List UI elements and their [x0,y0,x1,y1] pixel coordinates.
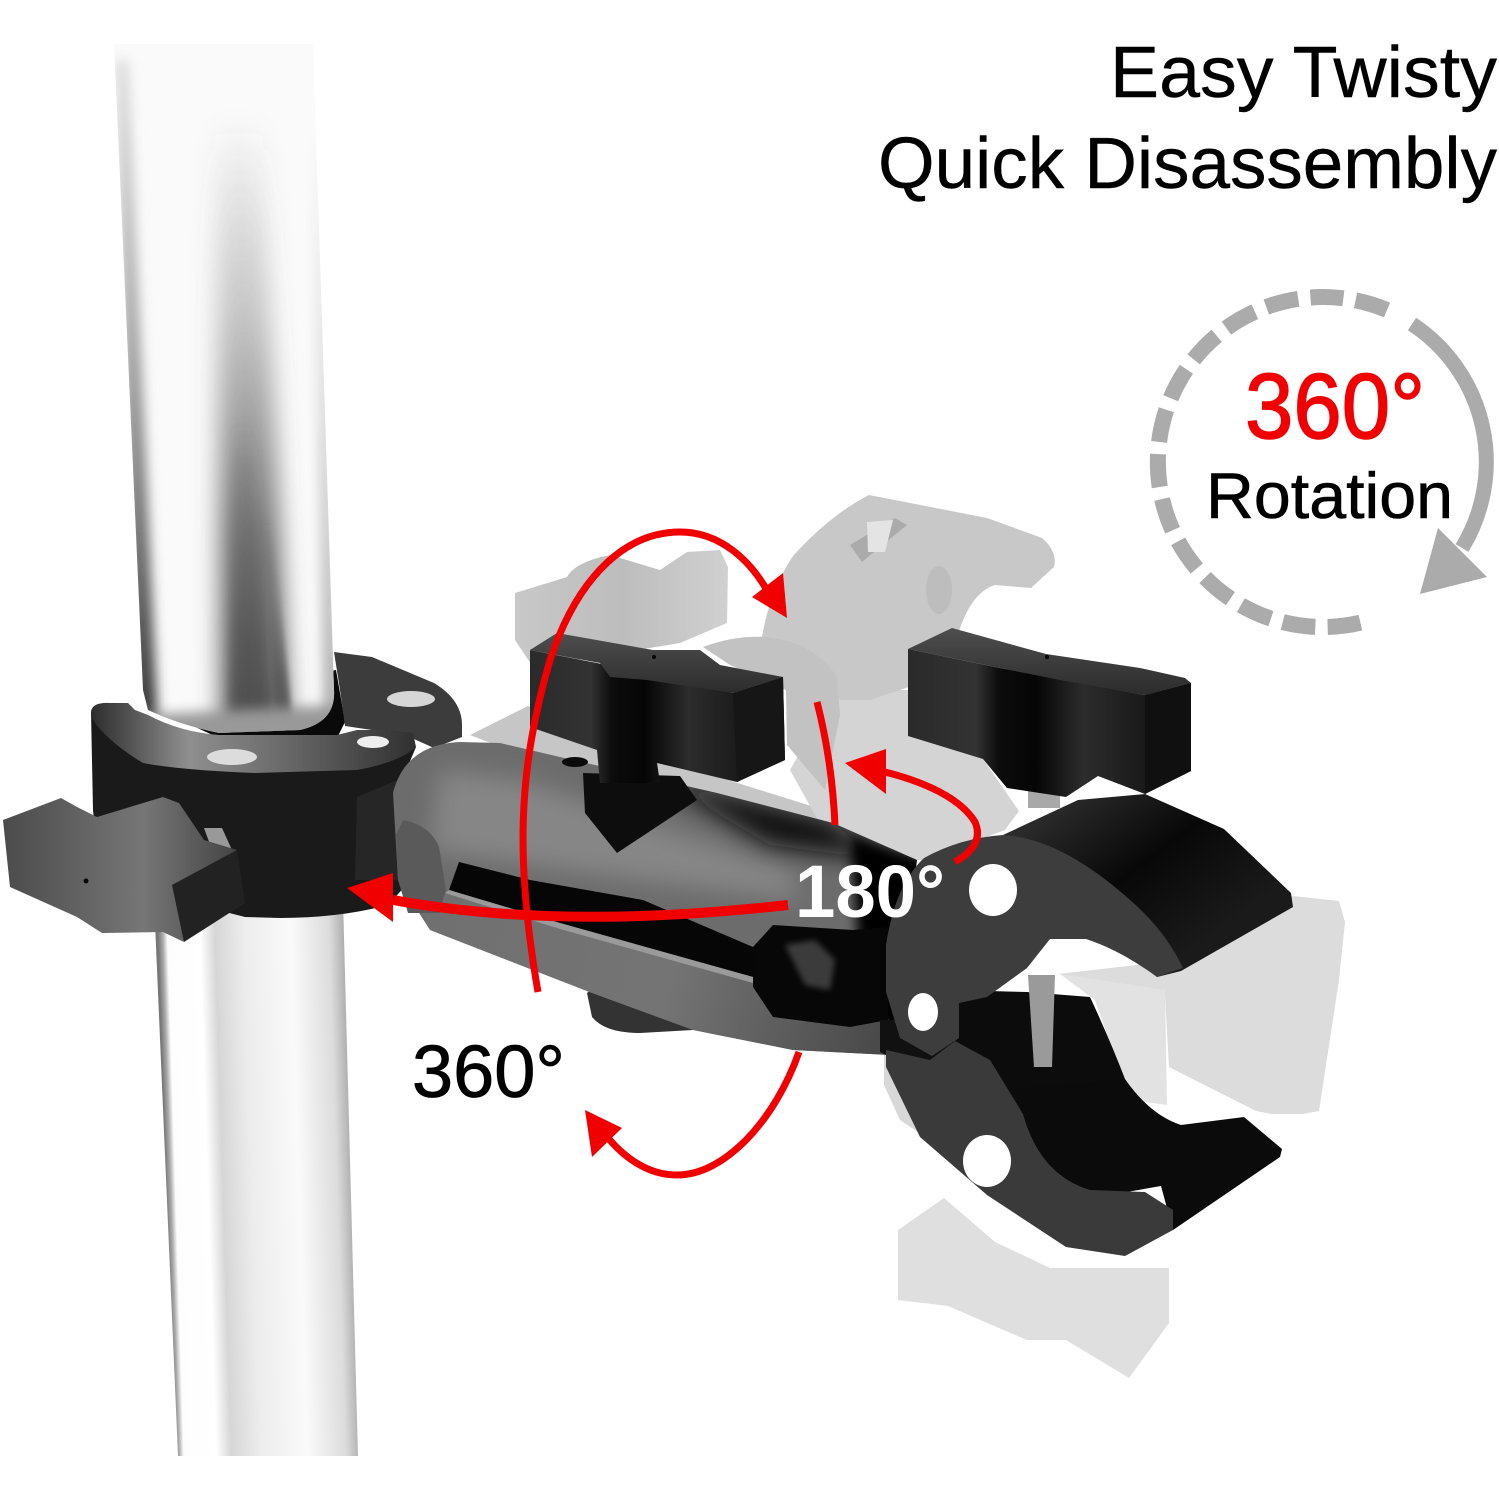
knob pin hole [1045,655,1049,659]
ghost threaded stud [867,520,893,552]
ghost piece below pivot [884,1050,930,1140]
pole clamp [91,652,462,918]
large arc [523,532,768,992]
side knob face [3,797,237,942]
ghost clamp upper jaw [762,495,1055,700]
knob pin hole [84,878,88,884]
knob top face [908,628,1191,695]
dashed ring arc [1158,297,1387,627]
knob front [530,650,785,783]
title [878,33,1497,204]
red arrow: 180 up [845,749,978,862]
head [845,749,886,794]
right knob [908,628,1191,808]
clamp notch [355,780,405,880]
rotation badge [1158,297,1487,627]
solid ring arc [1412,324,1486,548]
red arrow: 180 left [347,873,788,922]
ghost top knob left [515,550,728,667]
knob front [908,649,1191,797]
arm highlight [430,770,800,900]
ghost clamp lower ring [790,690,1019,860]
title line two: Quick Disassembly [878,124,1497,204]
arm dark end [844,832,917,1020]
arm lip highlight [445,890,753,983]
arm ball left facet [396,820,446,913]
arm silhouette [393,742,917,1055]
ghost stud recess [850,518,907,562]
rim under pivot [880,1020,960,1062]
hole lower [963,1135,1011,1187]
shaft [393,900,788,917]
knob end face [733,677,785,782]
ghost right knob [1058,896,1345,1114]
hole upper [969,864,1017,916]
steel pole [100,40,358,1456]
upper jaw side plate [886,835,1183,1056]
ghost hole one [926,566,952,614]
inner dark parts [950,990,1125,1125]
clamp body [91,712,416,918]
label 180 degrees: 180° [795,850,945,933]
arm slot [449,862,753,977]
clamp back jaw [334,652,462,748]
screw under right knob [1028,790,1060,808]
hole pivot [908,993,938,1031]
knob end face [1145,683,1191,794]
upper jaw dark top [1003,794,1293,977]
knob pin hole [652,655,656,659]
jaw clamp [880,794,1293,1256]
recess shadow behind pole [148,670,345,738]
arm dark knob right [753,925,888,1027]
rivet small [357,736,389,748]
clamp side knob [3,797,245,942]
ball arm [393,742,930,1060]
arrowhead [752,573,787,618]
ghost rotated clamp behind [470,495,1345,1378]
ghost arm section [470,706,920,870]
lower stud [587,975,693,1033]
title line one: Easy Twisty [1110,33,1497,113]
clamp top face [91,703,416,773]
knob stem cone [583,773,697,853]
side knob end [172,850,245,942]
360 red text: 360° [1245,354,1425,458]
dark knob highlight [785,940,835,990]
knob top face [530,633,783,693]
middle knob [530,633,785,783]
shaft [885,772,978,862]
lower jaw pad [1000,1079,1282,1230]
ghost lower knob [898,1198,1169,1378]
ring arrowhead [1420,528,1487,594]
rivet back [387,691,435,707]
label 360 degrees: 360° [412,1030,565,1113]
knob screw [204,828,232,850]
arm shadow under knob [680,786,873,871]
arm lower lip [430,930,890,1055]
threaded screw [1028,975,1055,1067]
lower arrowhead [585,1110,622,1157]
pole lower section [154,900,358,1456]
lower arc [604,1052,799,1175]
head [347,873,393,922]
red arrow: 360 arm rotation [523,532,835,1175]
ghost ball arm [703,637,840,790]
arc behind ball [817,702,835,825]
ghost right knob stem [1060,974,1167,1105]
rotation text: Rotation [1206,459,1453,532]
lower jaw side plate [886,1041,1173,1256]
rivet large [207,749,257,765]
arm small hole [562,757,588,767]
pole upper section [115,54,334,733]
